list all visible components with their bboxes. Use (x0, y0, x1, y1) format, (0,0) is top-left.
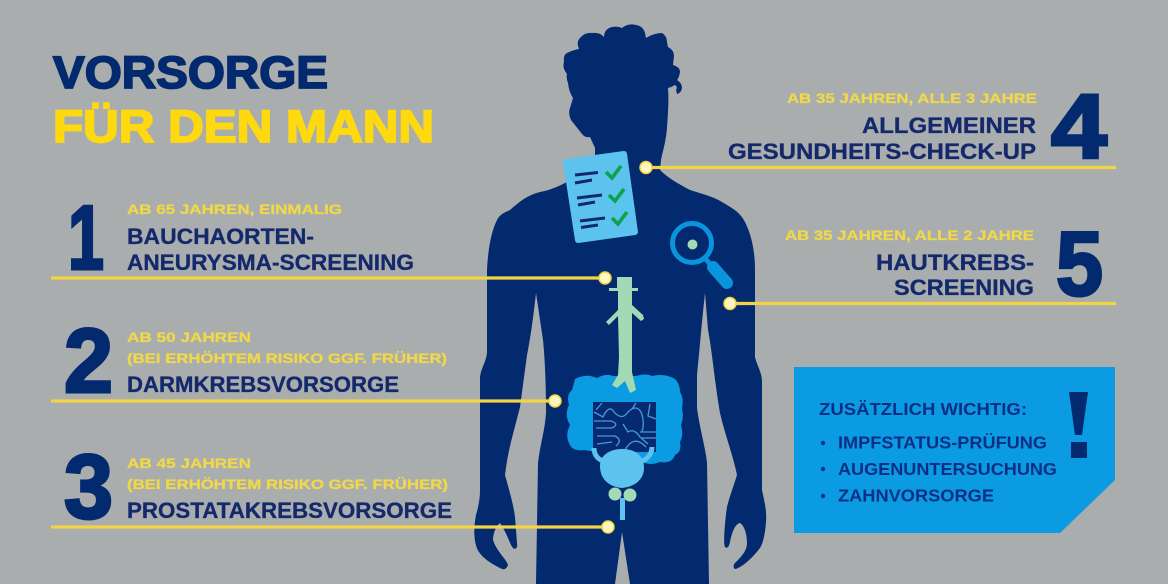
callout: additionally important: ZUSÄTZLICH WICHTIG: (819, 399, 1027, 419)
title: VORSORGE (53, 47, 328, 98)
item 3: Prostatakrebsvorsorge: PROSTATAKREBSVORSORGE (127, 498, 452, 523)
item 1: Bauchaorten-Aneurysma-Screening (51, 188, 611, 289)
item 1: Bauchaorten-Aneurysma-Screening: BAUCHAORTEN- (127, 224, 314, 249)
item 3: Prostatakrebsvorsorge (51, 437, 614, 538)
item 2: Darmkrebsvorsorge: AB 50 JAHREN (127, 329, 251, 345)
item 3: Prostatakrebsvorsorge: (BEI ERHÖHTEM RISIKO GGF. FRÜHER) (127, 476, 448, 492)
item 3: Prostatakrebsvorsorge: 3 (64, 437, 113, 538)
human body silhouette (474, 24, 766, 584)
item 2: Darmkrebsvorsorge: (BEI ERHÖHTEM RISIKO GGF. FRÜHER) (127, 350, 447, 366)
item 2: Darmkrebsvorsorge: 2 (64, 311, 113, 412)
icon: magnifying glass (672, 224, 727, 283)
title: FÜR DEN MANN (53, 101, 434, 152)
item 5: Hautkrebs-Screening (724, 214, 1116, 315)
item 2: Darmkrebsvorsorge (51, 311, 561, 412)
icon: clipboard checklist (566, 154, 635, 240)
callout: additionally important: IMPFSTATUS-PRÜFUNG (838, 432, 1047, 452)
item 1: Bauchaorten-Aneurysma-Screening: ANEURYSMA-SCREENING (127, 250, 414, 275)
item 5: Hautkrebs-Screening: 5 (1056, 214, 1103, 315)
callout: additionally important (794, 367, 1115, 533)
item 3: Prostatakrebsvorsorge: AB 45 JAHREN (127, 455, 251, 471)
bladder and prostate (594, 447, 652, 520)
item 1: Bauchaorten-Aneurysma-Screening: AB 65 JAHREN, EINMALIG (127, 201, 342, 217)
item 5: Hautkrebs-Screening: HAUTKREBS- (876, 250, 1034, 275)
item 4: Allgemeiner Gesundheits-Check-up: GESUNDHEITS-CHECK-UP (728, 139, 1036, 164)
item 4: Allgemeiner Gesundheits-Check-up: ALLGEMEINER (862, 113, 1036, 138)
item 1: Bauchaorten-Aneurysma-Screening: 1 (68, 188, 104, 289)
item 4: Allgemeiner Gesundheits-Check-up: AB 35 JAHREN, ALLE 3 JAHRE (787, 90, 1037, 106)
item 5: Hautkrebs-Screening: AB 35 JAHREN, ALLE 2 JAHRE (785, 227, 1034, 243)
item 4: Allgemeiner Gesundheits-Check-up (640, 77, 1116, 178)
item 5: Hautkrebs-Screening: SCREENING (894, 275, 1034, 300)
aorta (606, 277, 644, 393)
callout: additionally important: ZAHNVORSORGE (838, 486, 994, 506)
title (53, 47, 434, 152)
item 4: Allgemeiner Gesundheits-Check-up: 4 (1051, 77, 1107, 178)
colon (567, 374, 683, 464)
callout: additionally important: AUGENUNTERSUCHUNG (838, 459, 1057, 479)
small intestine (593, 402, 656, 452)
item 2: Darmkrebsvorsorge: DARMKREBSVORSORGE (127, 372, 399, 397)
